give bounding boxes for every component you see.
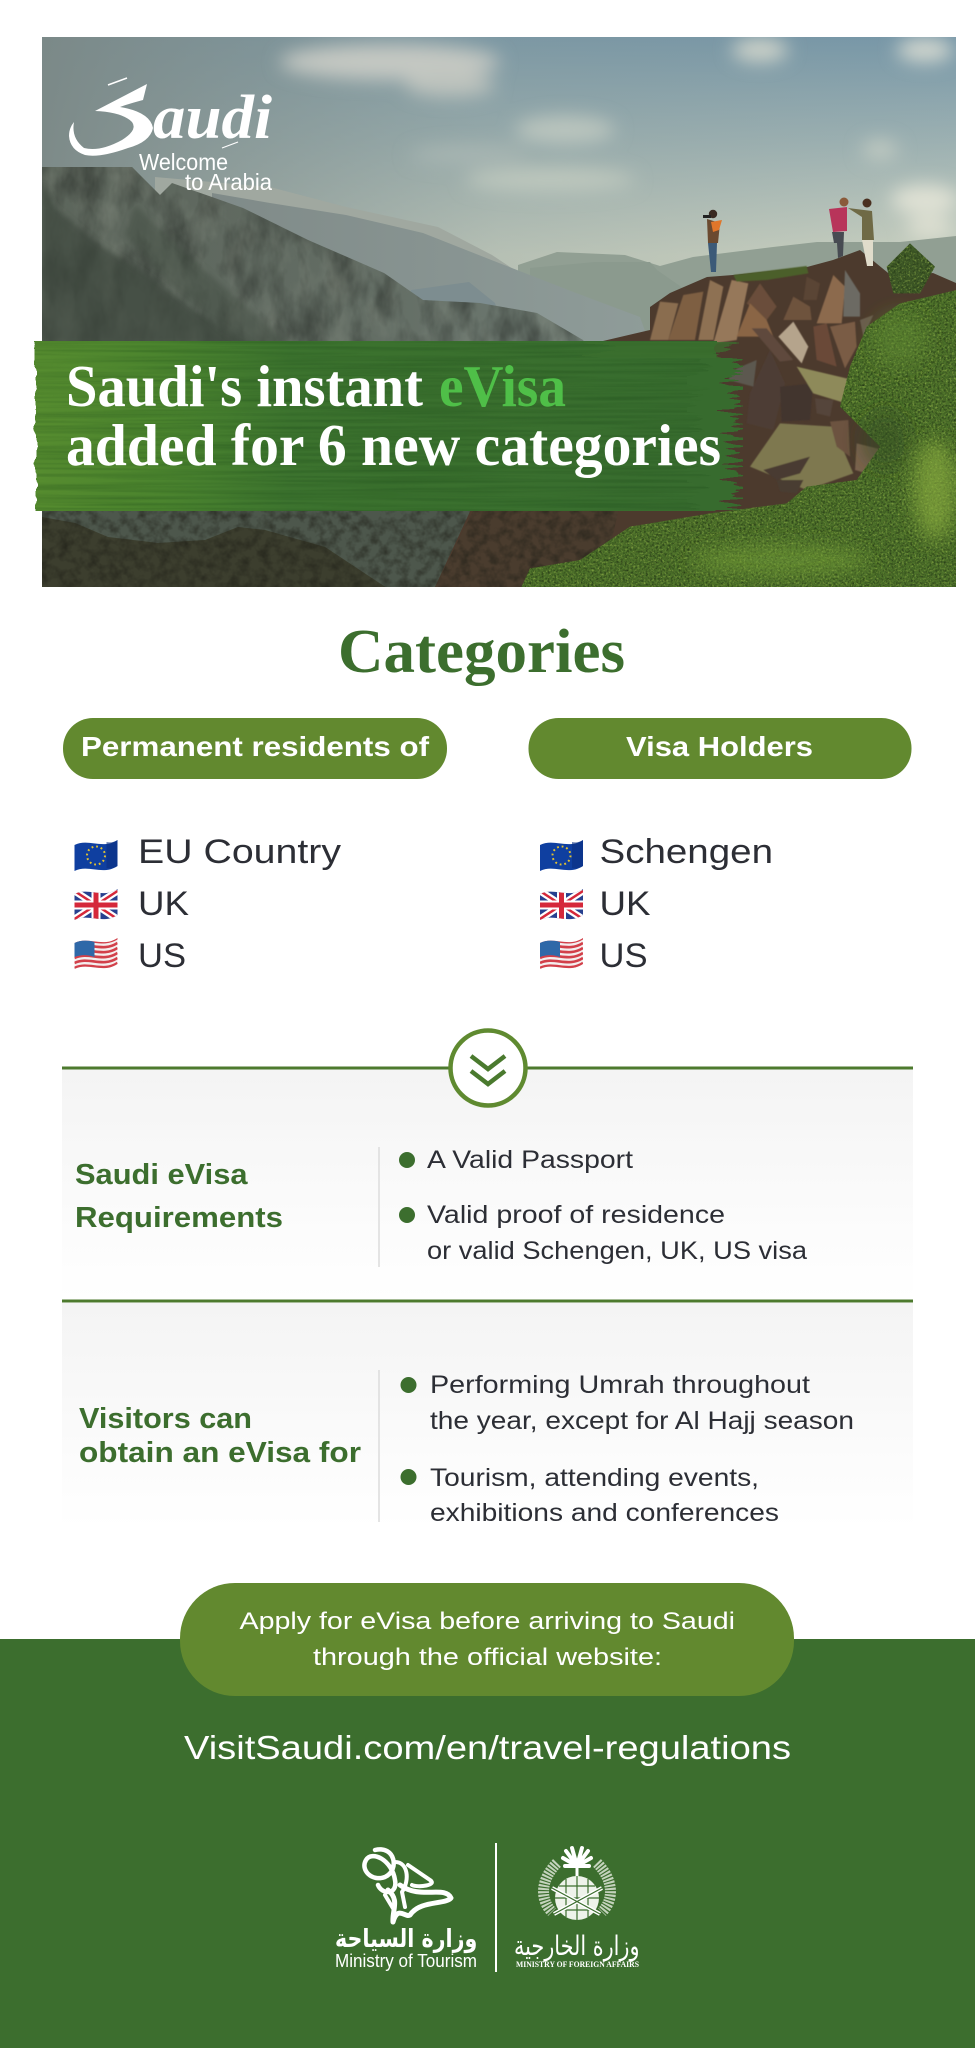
pill heading: Permanent residents of (81, 731, 430, 762)
logo: Ministry of Tourism (335, 1849, 477, 1971)
headline text: Saudi's instant (66, 353, 423, 419)
logo: Saudi Welcome to Arabia: Welcome (139, 149, 228, 175)
callout: apply before arriving: through the official website: (313, 1644, 662, 1671)
bullet: valid passport: A Valid Passport (427, 1146, 633, 1174)
icon: palm and swords emblem (544, 1848, 610, 1920)
heading (79, 1403, 361, 1469)
panel: permanent residents (63, 718, 447, 975)
heading (75, 1159, 283, 1234)
logo: Ministry of Foreign Affairs (514, 1848, 639, 1969)
bullet: tourism: Tourism, attending events, (430, 1464, 759, 1492)
panel: visa holders (528, 718, 912, 975)
logo: Saudi Welcome to Arabia (69, 78, 272, 195)
bullet: tourism (400, 1464, 779, 1527)
logo: Saudi Welcome to Arabia: audi (153, 84, 272, 152)
logo: Saudi Welcome to Arabia: to Arabia (185, 169, 272, 195)
icon: tourism calligraphy (364, 1849, 451, 1922)
rock base (435, 250, 956, 587)
bullet: Umrah: Performing Umrah throughout (430, 1371, 810, 1399)
bullet: proof of residence: or valid Schengen, UK, US visa (427, 1237, 807, 1265)
headline banner (36, 341, 735, 511)
icon: US flag (540, 936, 583, 972)
bullet: proof of residence (399, 1201, 807, 1265)
lower cliff (436, 511, 616, 587)
heading: Categories: Categories (338, 618, 625, 686)
bullet: Umrah (400, 1371, 854, 1435)
headline text: added for 6 new categories (66, 412, 721, 478)
hikers pair (829, 198, 874, 266)
label: Schengen: Schengen (600, 833, 773, 871)
label: EU Country: EU Country (138, 833, 341, 871)
headline text: eVisa (439, 353, 566, 419)
logo: Ministry of Foreign Affairs: MINISTRY OF FOREIGN AFFAIRS (516, 1959, 639, 1969)
pill heading (528, 718, 912, 779)
website URL: VisitSaudi.com/en/travel-regulations (184, 1729, 791, 1766)
far ridges (518, 236, 956, 288)
callout: apply before arriving: Apply for eVisa before arriving to Saudi (240, 1608, 735, 1635)
callout: apply before arriving (180, 1583, 794, 1696)
logo: Ministry of Foreign Affairs: وزارة الخارجية (514, 1930, 639, 1962)
logo: Ministry of Tourism: وزارة السياحة (335, 1925, 477, 1954)
headline text (66, 353, 721, 478)
icon: UK flag (540, 887, 583, 923)
vegetation (520, 243, 957, 590)
icon: UK flag (74, 887, 118, 923)
pill heading (63, 718, 447, 779)
icon: EU flag (74, 840, 118, 871)
label: US: US (138, 937, 186, 975)
rock shards (650, 266, 883, 493)
label: UK: UK (600, 885, 651, 923)
heading: Visitors can (79, 1403, 252, 1435)
bullet: Umrah: the year, except for Al Hajj season (430, 1407, 854, 1435)
hiker with camera (703, 210, 722, 272)
label: US: US (600, 937, 648, 975)
logo: Ministry of Tourism: Ministry of Tourism (335, 1951, 477, 1971)
icon: double chevron circle (450, 1030, 526, 1106)
bullet: proof of residence: Valid proof of residence (427, 1201, 725, 1229)
icon: EU flag (540, 840, 583, 871)
hero photo: mountains and hikers (42, 37, 959, 590)
forest below banner (42, 511, 470, 587)
divider between logos (495, 1843, 497, 1972)
label: UK: UK (138, 885, 189, 923)
panel: Saudi eVisa requirements (62, 1068, 913, 1299)
icon: US flag (74, 936, 118, 972)
front mountain (42, 167, 590, 350)
heading: Saudi eVisa (75, 1159, 248, 1191)
bullet: tourism: exhibitions and conferences (430, 1499, 779, 1527)
panel: visitors can obtain an eVisa for (62, 1301, 913, 1528)
brush band (36, 341, 735, 511)
heading: Requirements (75, 1202, 283, 1234)
heading: obtain an eVisa for (79, 1437, 361, 1469)
footer panel (0, 1639, 975, 2048)
pill heading: Visa Holders (626, 731, 813, 762)
